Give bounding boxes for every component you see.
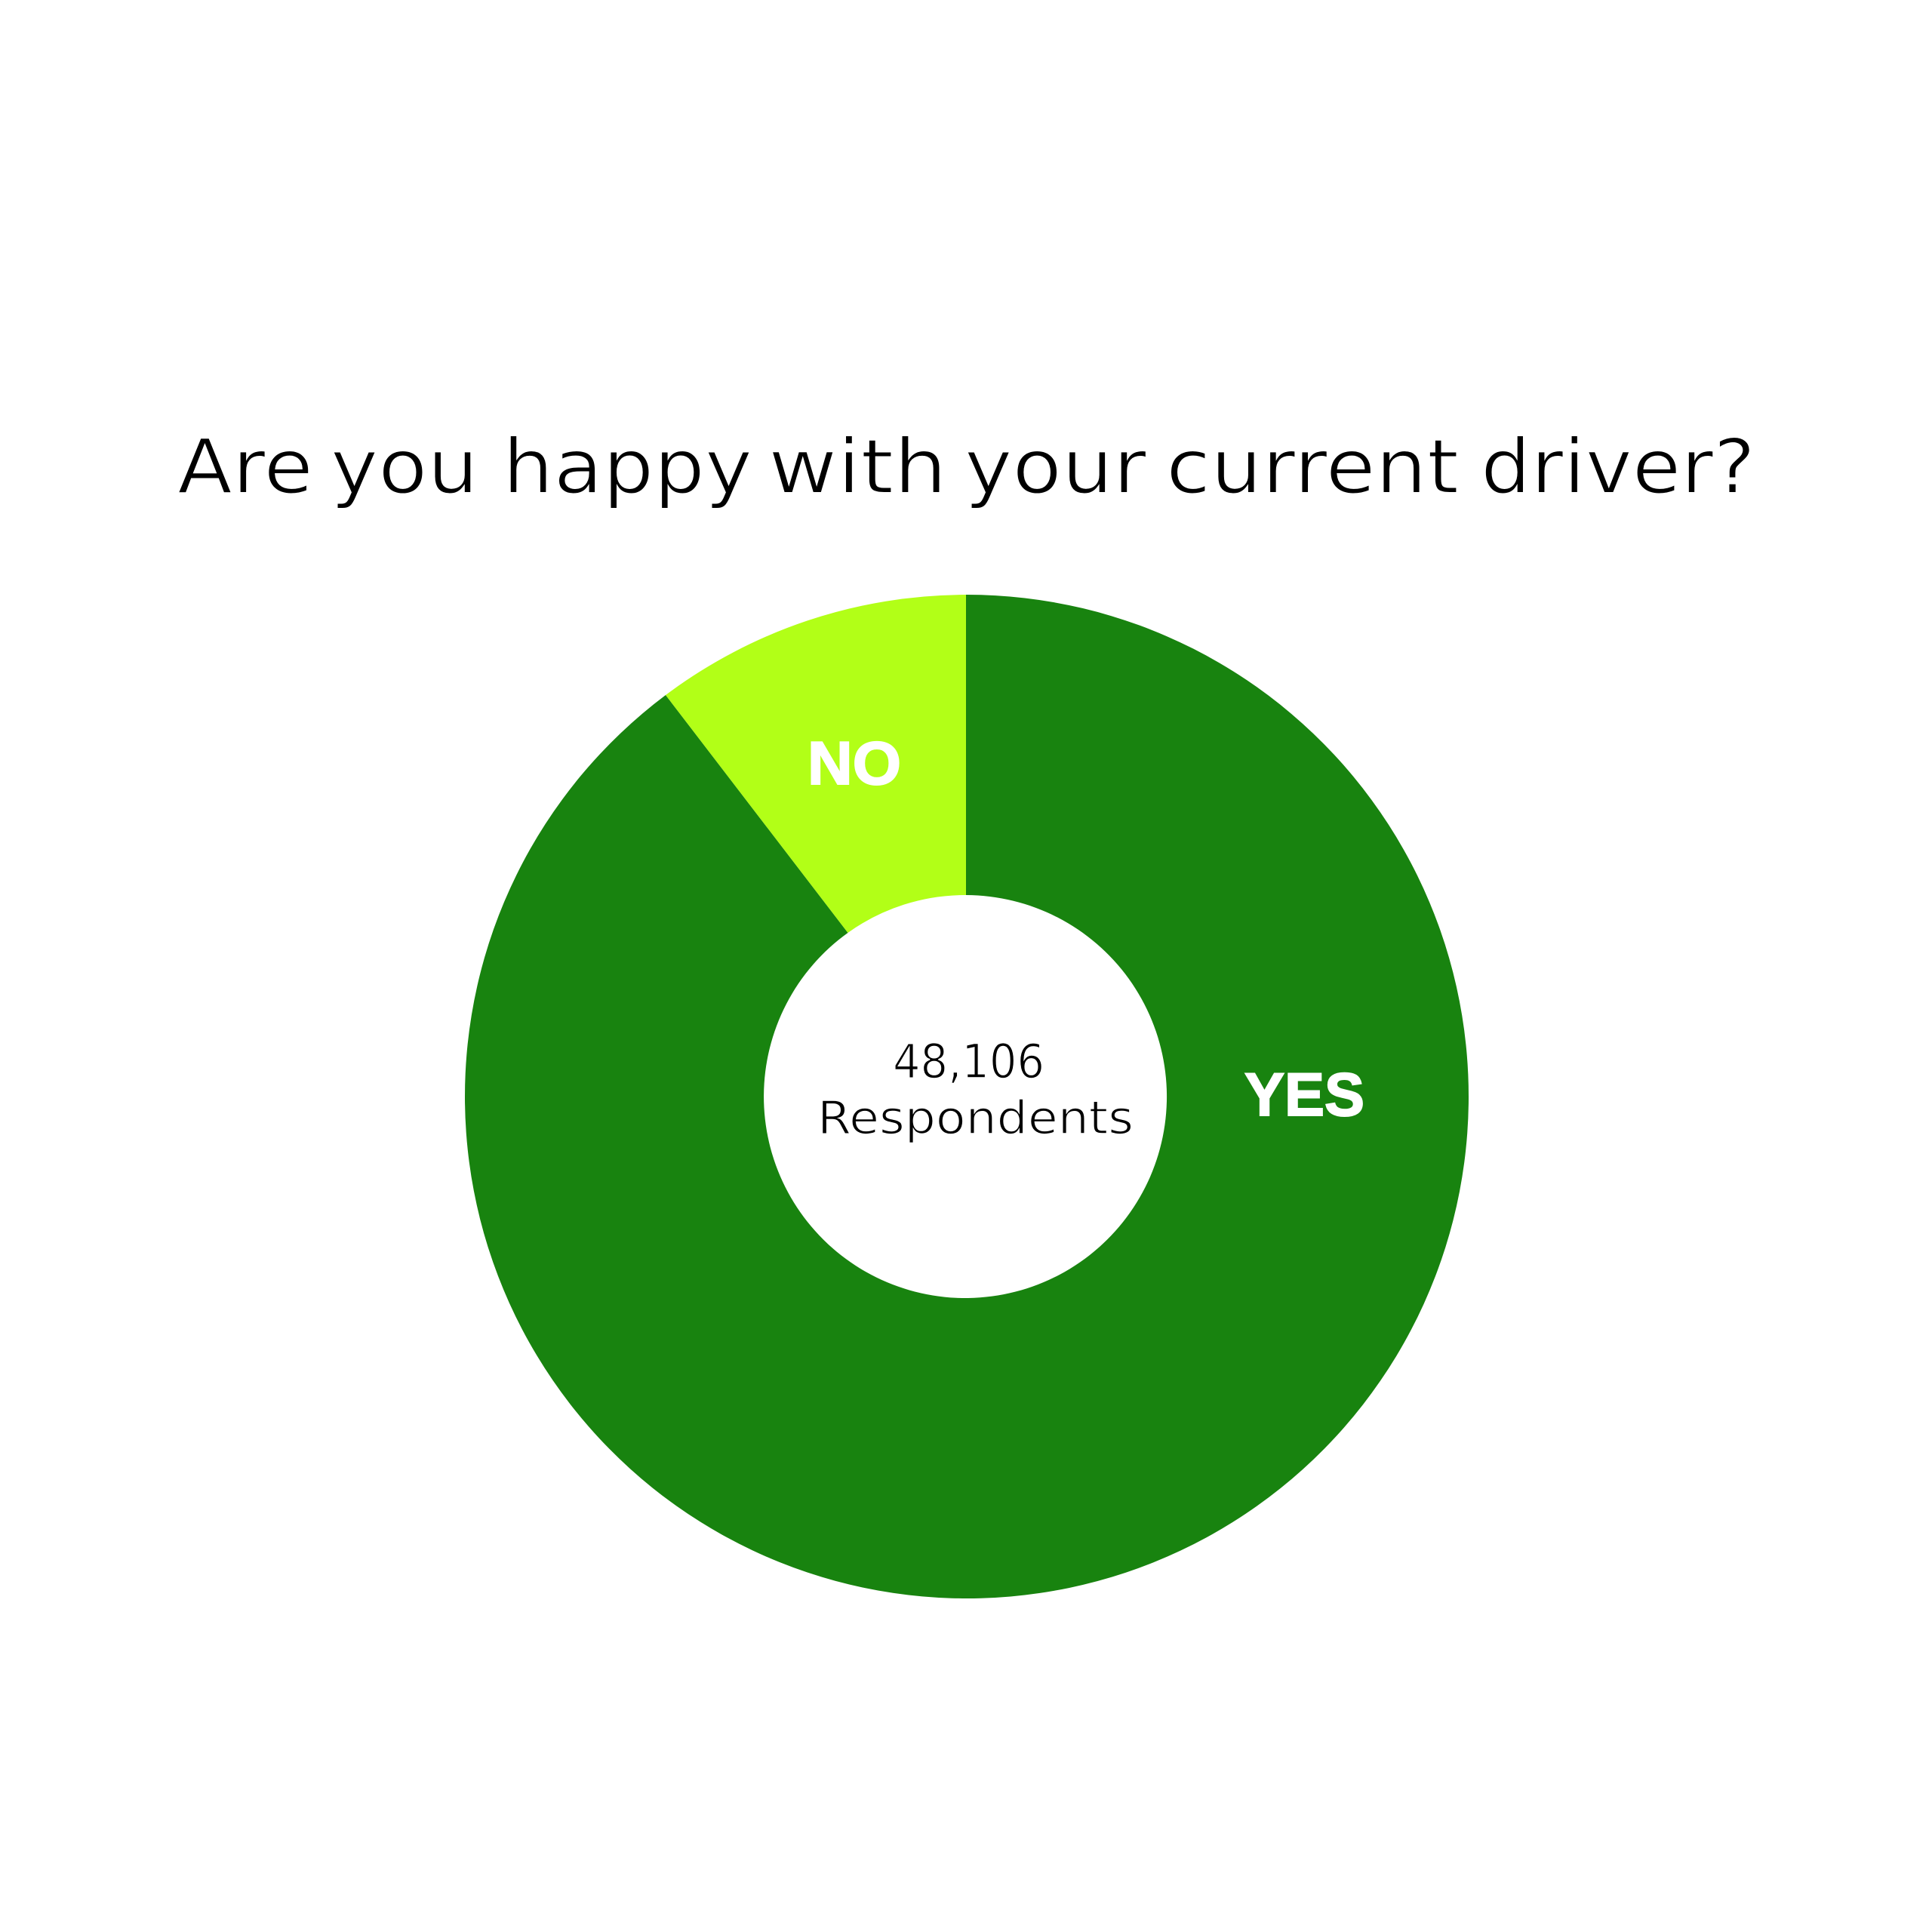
title: happy xyxy=(503,423,752,511)
title: with xyxy=(768,423,947,511)
title: Are xyxy=(177,423,313,511)
segment: no xyxy=(666,595,966,933)
label: yes: YES xyxy=(1244,1061,1364,1129)
label: no: NO xyxy=(808,730,901,798)
respondent count: 48,106 xyxy=(893,1034,1044,1089)
respondents caption: Respondents xyxy=(817,1091,1134,1145)
center label xyxy=(817,1034,1134,1145)
title: current xyxy=(1166,423,1459,511)
segment: yes xyxy=(465,595,1469,1598)
donut chart xyxy=(465,595,1469,1598)
title: your xyxy=(964,423,1147,511)
title: driver? xyxy=(1481,423,1755,511)
title: you xyxy=(331,423,478,511)
title xyxy=(177,423,1755,511)
